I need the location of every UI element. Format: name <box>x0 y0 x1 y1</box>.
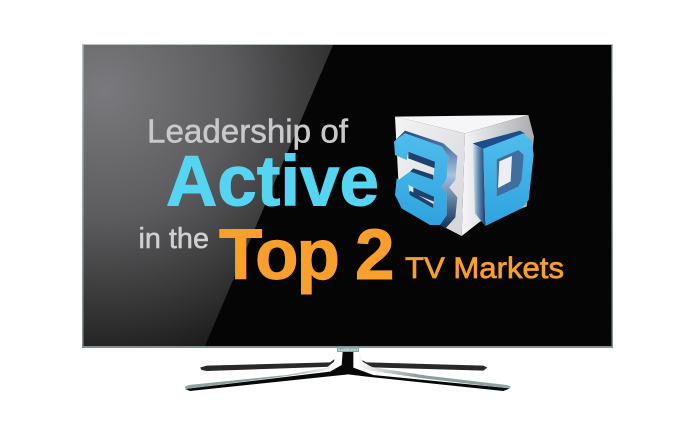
letter D top bevel <box>473 131 525 149</box>
title line: Top 2: Top <box>219 216 338 295</box>
title line: Leadership of: Leadership of <box>147 113 349 150</box>
samsung logo plate: SAMSUNG <box>338 347 358 352</box>
cube left face <box>395 117 465 236</box>
back foot right <box>358 358 487 371</box>
digit 3 bevel <box>394 131 457 229</box>
front leg left <box>185 352 343 388</box>
title line: Active: Active <box>166 142 379 222</box>
tv stand <box>185 352 511 391</box>
title line: Top 2: 2 <box>355 216 392 295</box>
letter D inner wall <box>497 150 524 197</box>
digit 3 face <box>394 133 448 225</box>
tv bezel <box>82 44 613 348</box>
central neck shadow <box>185 352 510 391</box>
tv screen <box>84 45 612 346</box>
letter D window <box>498 156 512 188</box>
letter D side bevel <box>473 144 485 226</box>
digit 3 counter walls <box>408 152 435 208</box>
icon: 3D cube <box>394 115 534 236</box>
letter D face <box>483 133 534 226</box>
title line: in the: in the <box>138 223 209 255</box>
back foot left <box>200 358 338 371</box>
screen glare <box>84 45 333 346</box>
front leg right <box>355 352 511 388</box>
cube right face <box>462 115 534 236</box>
title line: TV Markets: TV Markets <box>405 252 564 285</box>
cube top face <box>395 115 528 133</box>
